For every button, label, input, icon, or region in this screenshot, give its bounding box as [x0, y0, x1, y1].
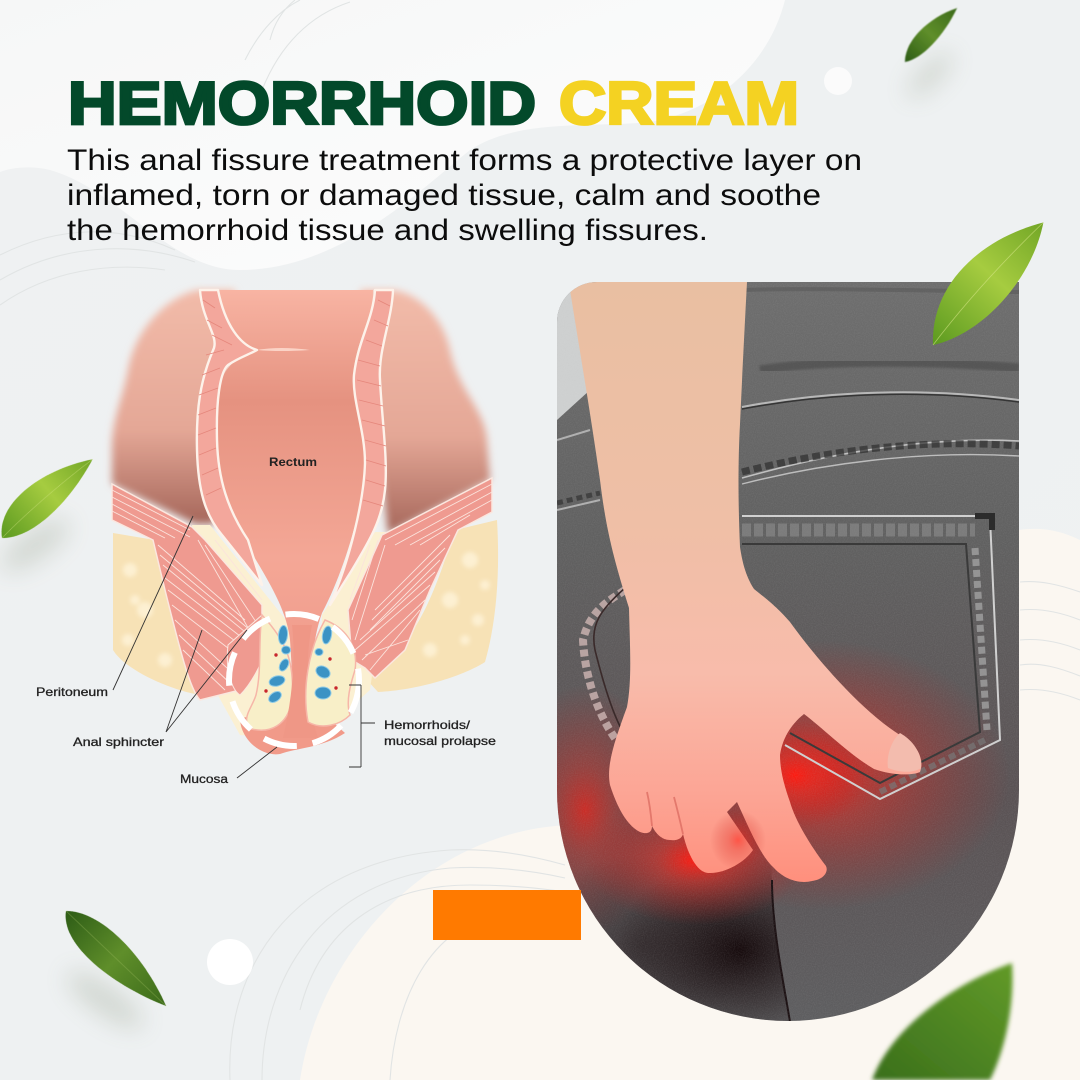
jeans noise texture — [557, 282, 1019, 1022]
orange rectangle — [433, 890, 581, 940]
decorative circle bottom — [207, 939, 253, 985]
label: peritoneum: Peritoneum — [36, 685, 108, 699]
photo panel — [557, 282, 1019, 1021]
pelvic tissue lobes — [112, 290, 490, 534]
fat right — [367, 520, 498, 692]
rectum — [216, 290, 373, 735]
label: hemorrhoids: Hemorrhoids/ — [384, 718, 471, 732]
leaf: bottom left — [53, 898, 178, 1020]
pale tissue between muscles — [192, 525, 392, 740]
title word: hemorrhoid: HEMORRHOID — [68, 70, 536, 137]
white blob top — [0, 0, 785, 270]
rectal wall right — [330, 290, 393, 605]
label: mucosal prolapse: mucosal prolapse — [384, 734, 496, 748]
label: mucosa: Mucosa — [180, 772, 228, 786]
mucosa — [240, 715, 345, 754]
shading and red glow — [557, 654, 991, 1021]
hemorrhoid tissue left — [247, 615, 293, 730]
cream blob bottom — [300, 529, 1080, 1080]
jeans seams — [557, 289, 1019, 799]
hemorrhoid tissue right — [306, 620, 356, 726]
muscle left — [112, 484, 262, 700]
description text: inflamed, torn or damaged tissue, calm and soothe — [67, 179, 821, 212]
muscle right — [348, 478, 492, 678]
fat left — [113, 533, 200, 695]
description text: This anal fissure treatment forms a protective layer on — [67, 144, 862, 177]
sphincter muscle bits — [227, 615, 270, 695]
buttock crease — [772, 880, 790, 1022]
title word: cream: CREAM — [559, 70, 799, 137]
blood vessels — [267, 625, 333, 705]
description text — [67, 144, 862, 247]
anatomy diagram — [36, 290, 498, 786]
leader lines — [113, 516, 375, 778]
decorative circle top — [824, 67, 852, 95]
anal canal — [283, 625, 318, 738]
red dots — [264, 653, 338, 693]
leaf: top right small — [897, 0, 963, 67]
label: rectum: Rectum — [269, 455, 317, 469]
background behind arm — [557, 282, 590, 420]
fingernail — [888, 733, 921, 772]
finger shadows — [647, 792, 683, 834]
left pocket — [583, 590, 625, 745]
title — [68, 70, 799, 137]
rectal wall left — [197, 290, 262, 585]
leaf: left — [0, 443, 102, 549]
leaf: bottom right blurred — [872, 963, 1013, 1080]
red overlay on fingers — [714, 814, 762, 866]
back pocket — [742, 516, 1000, 799]
jeans — [557, 282, 1019, 1022]
leaf: large right — [911, 203, 1060, 360]
description text: the hemorrhoid tissue and swelling fissures. — [67, 214, 708, 247]
arm and hand — [570, 282, 921, 882]
dashed highlight circle — [229, 614, 359, 746]
label: anal sphincter: Anal sphincter — [73, 735, 164, 749]
